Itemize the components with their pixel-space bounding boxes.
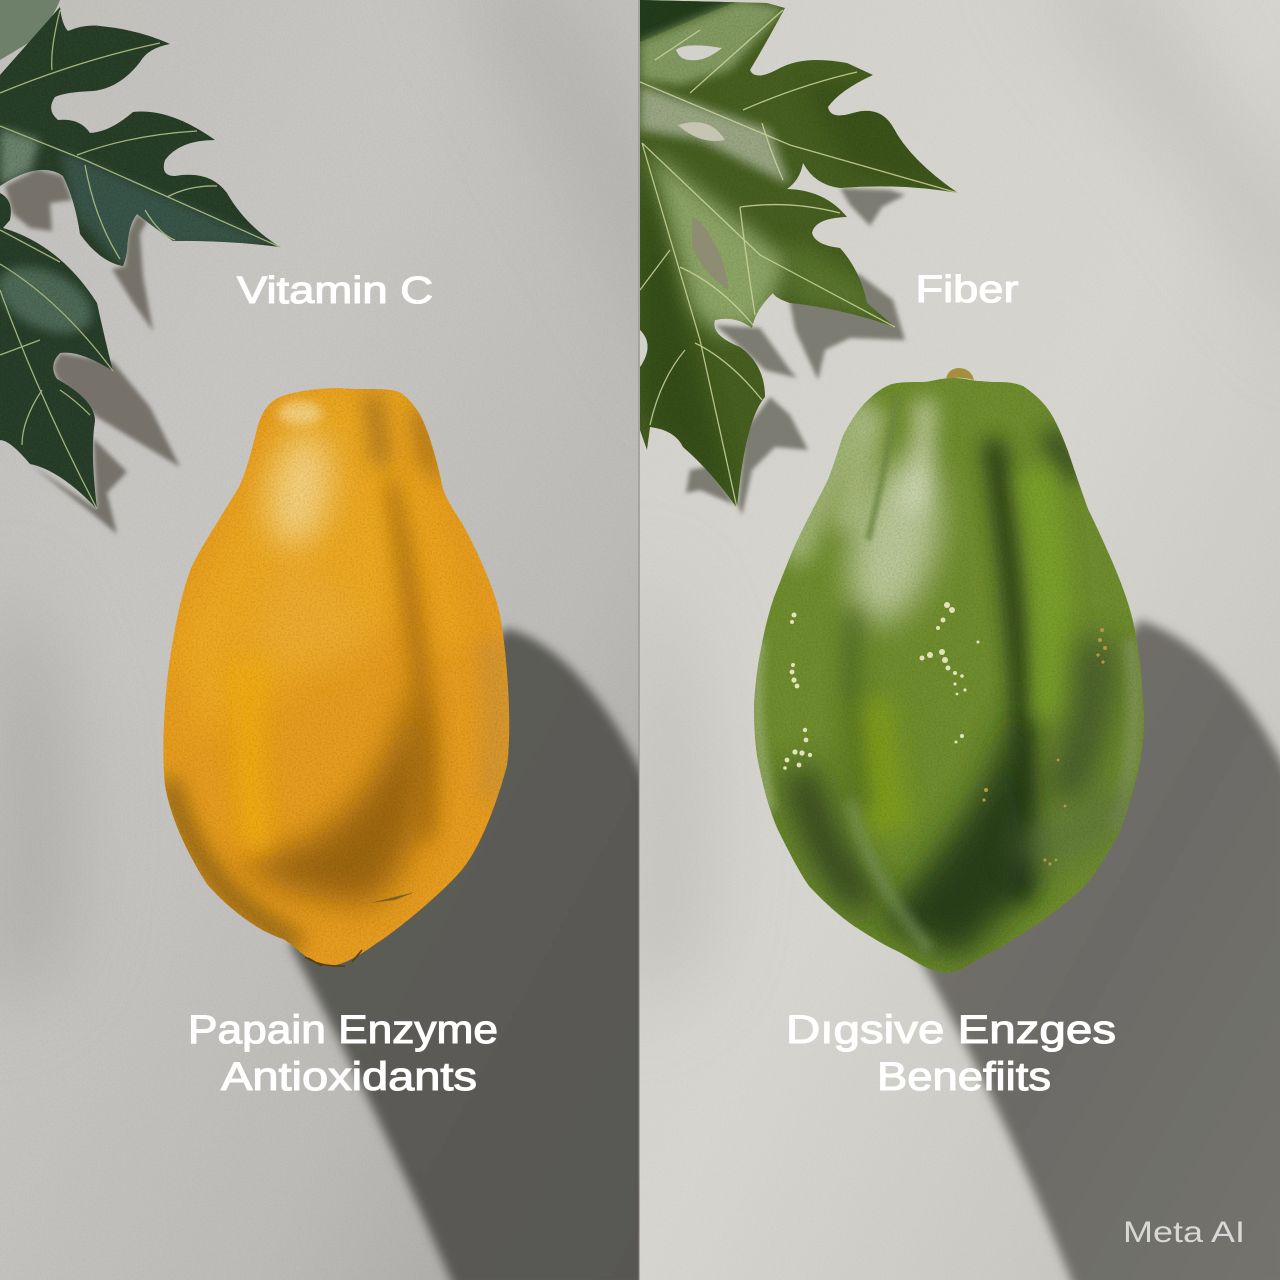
label: Fiber: Fiber	[916, 269, 1019, 311]
label: Papain Enzyme Antioxidants: Antioxidants	[221, 1055, 477, 1099]
hole: bright tear	[678, 122, 725, 141]
icon: stem	[946, 368, 974, 380]
icon: leaf upper left	[0, 7, 280, 266]
hole: upper leaf	[676, 45, 722, 60]
label: Digestive Enzymes Benefits: Dıgsive Enzges	[786, 1008, 1116, 1052]
speckles: gold skin marks	[982, 628, 1107, 866]
watermark: Meta AI: Meta AI	[1123, 1216, 1245, 1249]
label: Digestive Enzymes Benefits	[789, 1014, 1115, 1091]
hole: teardrop	[692, 217, 728, 290]
illustration: green papaya	[745, 368, 1155, 980]
label: Papain Enzyme Antioxidants: Papain Enzyme	[188, 1008, 498, 1052]
label: Digestive Enzymes Benefits: Benefiits	[877, 1055, 1051, 1099]
label: Vitamin C: Vitamin C	[237, 270, 433, 312]
leaf shadows left	[5, 169, 180, 534]
leaf shadows right	[686, 188, 905, 515]
icon: leaf lower left	[0, 190, 120, 520]
illustration: ripe yellow papaya	[150, 380, 520, 980]
cast shadow: ripe papaya	[290, 628, 650, 1280]
hole: side bay	[640, 330, 648, 367]
cast shadow: green papaya	[915, 620, 1280, 1280]
icon: large leaf	[640, 0, 970, 515]
label: Papain Enzyme Antioxidants	[191, 1014, 497, 1091]
panel: ripe papaya	[0, 0, 700, 1280]
panel: green papaya	[620, 0, 1280, 1280]
icon: pale leaf corner	[0, 0, 60, 60]
speckles: pale skin marks	[783, 602, 980, 770]
